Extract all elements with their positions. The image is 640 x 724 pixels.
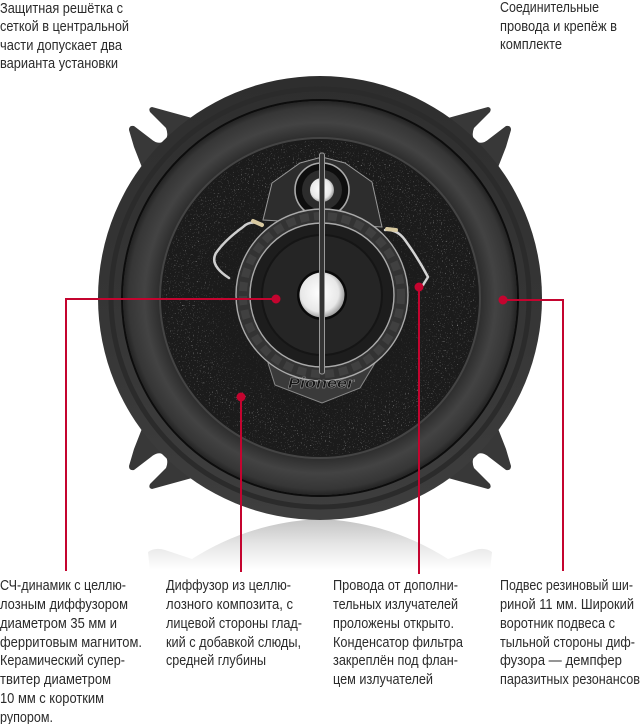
text: midrange note: 10 мм с коротким <box>0 690 104 707</box>
text: grille note: Защитная решётка с <box>0 0 123 17</box>
tweeter <box>295 163 349 217</box>
text: accessories note <box>500 0 617 53</box>
text: diffuser note: Диффузор из целлю- <box>166 577 291 594</box>
rubber surround <box>123 101 517 495</box>
text: accessories note: провода и крепёж в <box>500 18 617 35</box>
text: diffuser note: лозного композита, с <box>166 596 293 613</box>
speaker photo <box>98 76 542 520</box>
grille bar <box>320 153 324 374</box>
midrange ring <box>236 209 408 381</box>
mounting tabs <box>129 107 511 489</box>
text: grille note <box>0 0 129 72</box>
text: grille note: варианта установки <box>0 55 118 72</box>
dust cap <box>297 270 347 320</box>
text: grille note: сеткой в центральной <box>0 18 129 35</box>
text: midrange note: ферритовым магнитом. <box>0 634 142 651</box>
text: surround note <box>500 577 640 688</box>
text: diffuser note: лицевой стороны глад- <box>166 615 302 632</box>
wires <box>214 221 428 285</box>
text: midrange note <box>0 577 142 724</box>
leader: midrange <box>66 296 280 571</box>
text: diffuser note: средней глубины <box>166 652 266 669</box>
text: surround note: воротник подвеса с <box>500 615 615 632</box>
text: midrange note: лозным диффузором <box>0 596 128 613</box>
text: grille note: части допускает два <box>0 37 123 54</box>
text: midrange note: твитер диаметром <box>0 671 111 688</box>
tweeter housing and bridge <box>263 157 382 227</box>
leader: wires <box>416 284 422 574</box>
text: diffuser note <box>166 577 302 669</box>
text: midrange note: диаметром 35 мм и <box>0 615 117 632</box>
text: wires note: проложены открыто. <box>333 615 454 632</box>
diffuser cone <box>160 138 480 458</box>
reflection of the speaker <box>148 519 492 572</box>
lower logo lobe <box>268 363 375 403</box>
midrange cone <box>250 223 394 367</box>
text: midrange note: Керамический супер- <box>0 652 125 669</box>
leader: surround <box>500 296 563 571</box>
text: accessories note: комплекте <box>500 36 562 53</box>
logo: Pioneer <box>288 375 355 392</box>
text: midrange note: СЧ-динамик с целлю- <box>0 577 126 594</box>
text: wires note: закреплён под флан- <box>333 652 458 669</box>
text: wires note: цем излучателей <box>333 671 433 688</box>
leader: diffuser <box>238 394 244 572</box>
outer frame <box>98 76 542 520</box>
text: diffuser note: кий с добавкой слюды, <box>166 634 301 651</box>
text: wires note: Конденсатор фильтра <box>333 634 464 651</box>
text: wires note: Провода от дополни- <box>333 577 458 594</box>
text: wires note <box>333 577 464 688</box>
text: surround note: фузора — демпфер <box>500 652 622 669</box>
text: wires note: тельных излучателей <box>333 596 458 613</box>
